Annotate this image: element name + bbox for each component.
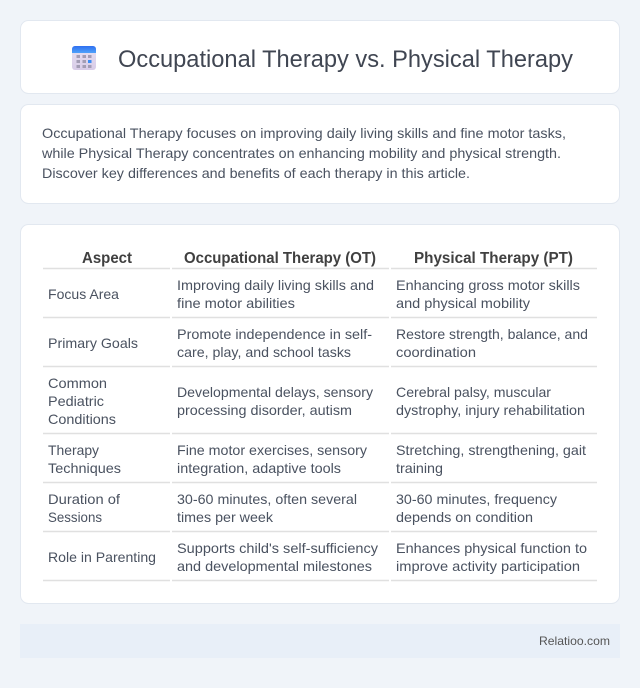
row: Duration of Sessions: Duration of <box>48 491 120 507</box>
row: Role in Parenting: Role in Parenting <box>48 549 156 565</box>
text block: introduction: Discover key differences and benefits of each therapy in this article. <box>42 165 470 181</box>
panel: title header <box>20 20 620 94</box>
row: Focus Area: fine motor abilities <box>177 295 295 311</box>
row: Duration of Sessions: Sessions <box>48 509 102 525</box>
row: Duration of Sessions: depends on condition <box>396 509 533 525</box>
icon: calendar <box>72 46 96 70</box>
footer text: Relatioo.com <box>539 634 610 648</box>
row: Primary Goals: coordination <box>396 344 476 360</box>
row: Focus Area <box>48 277 580 311</box>
row: Common Pediatric Conditions: Cerebral palsy, muscular <box>396 384 551 400</box>
row: Focus Area: Improving daily living skills and <box>177 277 374 293</box>
text block: introduction: Occupational Therapy focuses on improving daily living skills and fine motor tasks, <box>42 125 566 141</box>
row: Primary Goals: care, play, and school tasks <box>177 344 351 360</box>
row: Primary Goals <box>48 326 588 360</box>
row: Primary Goals: Promote independence in self- <box>177 326 372 342</box>
row: Focus Area: Focus Area <box>48 286 119 302</box>
row: Therapy Techniques <box>48 442 586 476</box>
row: Therapy Techniques: Therapy <box>48 442 99 458</box>
row: Therapy Techniques: training <box>396 460 443 476</box>
row: Focus Area: and physical mobility <box>396 295 530 311</box>
row: Common Pediatric Conditions: Developmental delays, sensory <box>177 384 373 400</box>
panel: footer <box>20 624 620 658</box>
table header row <box>82 250 573 267</box>
row: Duration of Sessions: 30-60 minutes, often several <box>177 491 357 507</box>
text block: introduction: while Physical Therapy concentrates on enhancing mobility and physical strength. <box>41 145 561 161</box>
row: Role in Parenting: Supports child's self-sufficiency <box>177 540 378 556</box>
table header row: Occupational Therapy (OT) <box>184 250 376 267</box>
row: Duration of Sessions: 30-60 minutes, frequency <box>396 491 557 507</box>
row: Therapy Techniques: Stretching, strengthening, gait <box>396 442 586 458</box>
panel: comparison table <box>20 224 620 604</box>
table header row: Physical Therapy (PT) <box>414 250 573 267</box>
row: Common Pediatric Conditions: Conditions <box>48 411 116 427</box>
row: Common Pediatric Conditions: Common <box>48 375 107 391</box>
row: Role in Parenting: and developmental milestones <box>177 558 372 574</box>
row: Therapy Techniques: integration, adaptive tools <box>177 460 341 476</box>
table header row: Aspect <box>82 250 133 267</box>
row: Duration of Sessions: times per week <box>177 509 274 525</box>
row: Primary Goals: Primary Goals <box>48 335 138 351</box>
text block: introduction <box>41 125 566 181</box>
row: Duration of Sessions <box>48 491 557 525</box>
row: Role in Parenting: improve activity participation <box>396 558 580 574</box>
row: Therapy Techniques: Techniques <box>48 460 121 476</box>
row: Therapy Techniques: Fine motor exercises, sensory <box>177 442 367 458</box>
row: Common Pediatric Conditions: dystrophy, injury rehabilitation <box>396 402 585 418</box>
row: Role in Parenting <box>48 540 587 574</box>
row: Focus Area: Enhancing gross motor skills <box>396 277 580 293</box>
row: Primary Goals: Restore strength, balance, and <box>396 326 588 342</box>
panel: introduction <box>20 104 620 204</box>
row: Role in Parenting: Enhances physical function to <box>396 540 587 556</box>
title: Occupational Therapy vs. Physical Therapy <box>118 46 573 73</box>
row: Common Pediatric Conditions <box>48 375 585 427</box>
row: Common Pediatric Conditions: processing disorder, autism <box>177 402 352 418</box>
row: Common Pediatric Conditions: Pediatric <box>48 393 104 409</box>
